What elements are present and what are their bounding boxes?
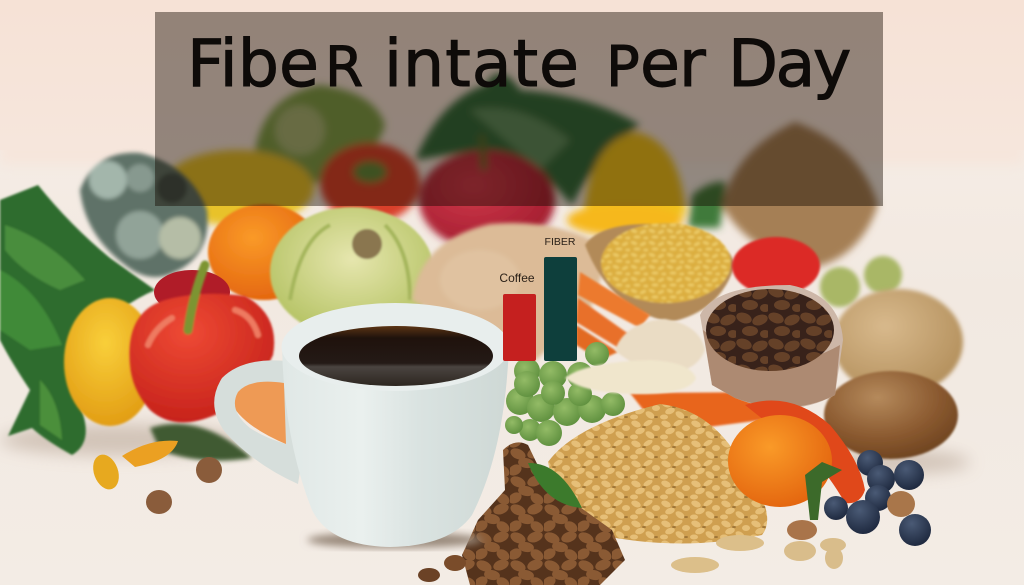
coffee label: Coffee (499, 271, 535, 285)
cauliflower (80, 153, 208, 277)
central grain pile (548, 404, 767, 544)
cup shadow (307, 532, 483, 548)
yellow squash (162, 150, 314, 226)
green cabbage (270, 207, 434, 337)
fiber label: FIBER (545, 236, 576, 248)
mushrooms and white bean (565, 319, 705, 394)
coffee bar (503, 294, 536, 361)
round potato (833, 289, 963, 395)
brown nut (824, 371, 958, 459)
coffee cup (214, 303, 509, 548)
fiber bar (544, 257, 577, 361)
red pepper back (320, 143, 420, 223)
yellow pear (584, 132, 686, 215)
title: Day (728, 27, 850, 102)
orange chili and tomato front (728, 400, 865, 520)
bar chart: coffee vs fiber (499, 236, 577, 361)
small peppers on table (89, 441, 178, 493)
orange fruit (208, 204, 320, 300)
cup handle (214, 360, 305, 484)
coffee surface (299, 326, 493, 386)
red apple (419, 150, 555, 250)
title: intate (384, 27, 602, 102)
blueberries (824, 450, 931, 546)
back row of produce (162, 74, 878, 268)
green grapes (820, 256, 902, 307)
orange slice in handle (230, 380, 288, 445)
title: er (640, 27, 724, 102)
tomato right (732, 237, 820, 295)
green leaf on beans (528, 463, 582, 508)
cup rim (282, 303, 510, 391)
cup body (282, 346, 509, 547)
banner panel (155, 12, 883, 206)
grains bowl (585, 223, 735, 322)
glass bowl of coffee beans (700, 285, 843, 408)
green peas (505, 342, 625, 446)
coffee beans pile (418, 442, 625, 585)
left greens (0, 185, 155, 455)
small red pepper behind (154, 270, 230, 314)
title: R (325, 35, 381, 99)
soft shadows under food (0, 424, 970, 474)
title: P (606, 35, 640, 100)
leafy greens back (255, 85, 385, 192)
green sprig (688, 182, 726, 228)
title banner (155, 12, 883, 206)
dark greens back (415, 74, 640, 205)
title: Fibe (187, 27, 319, 102)
lemon (64, 298, 156, 426)
scattered nuts and seeds (146, 457, 915, 573)
orange carrots (576, 272, 780, 428)
wicker basket (722, 122, 878, 268)
bread loaf (412, 223, 610, 360)
dark leaf under pepper (150, 424, 252, 461)
red bell pepper (129, 265, 274, 422)
